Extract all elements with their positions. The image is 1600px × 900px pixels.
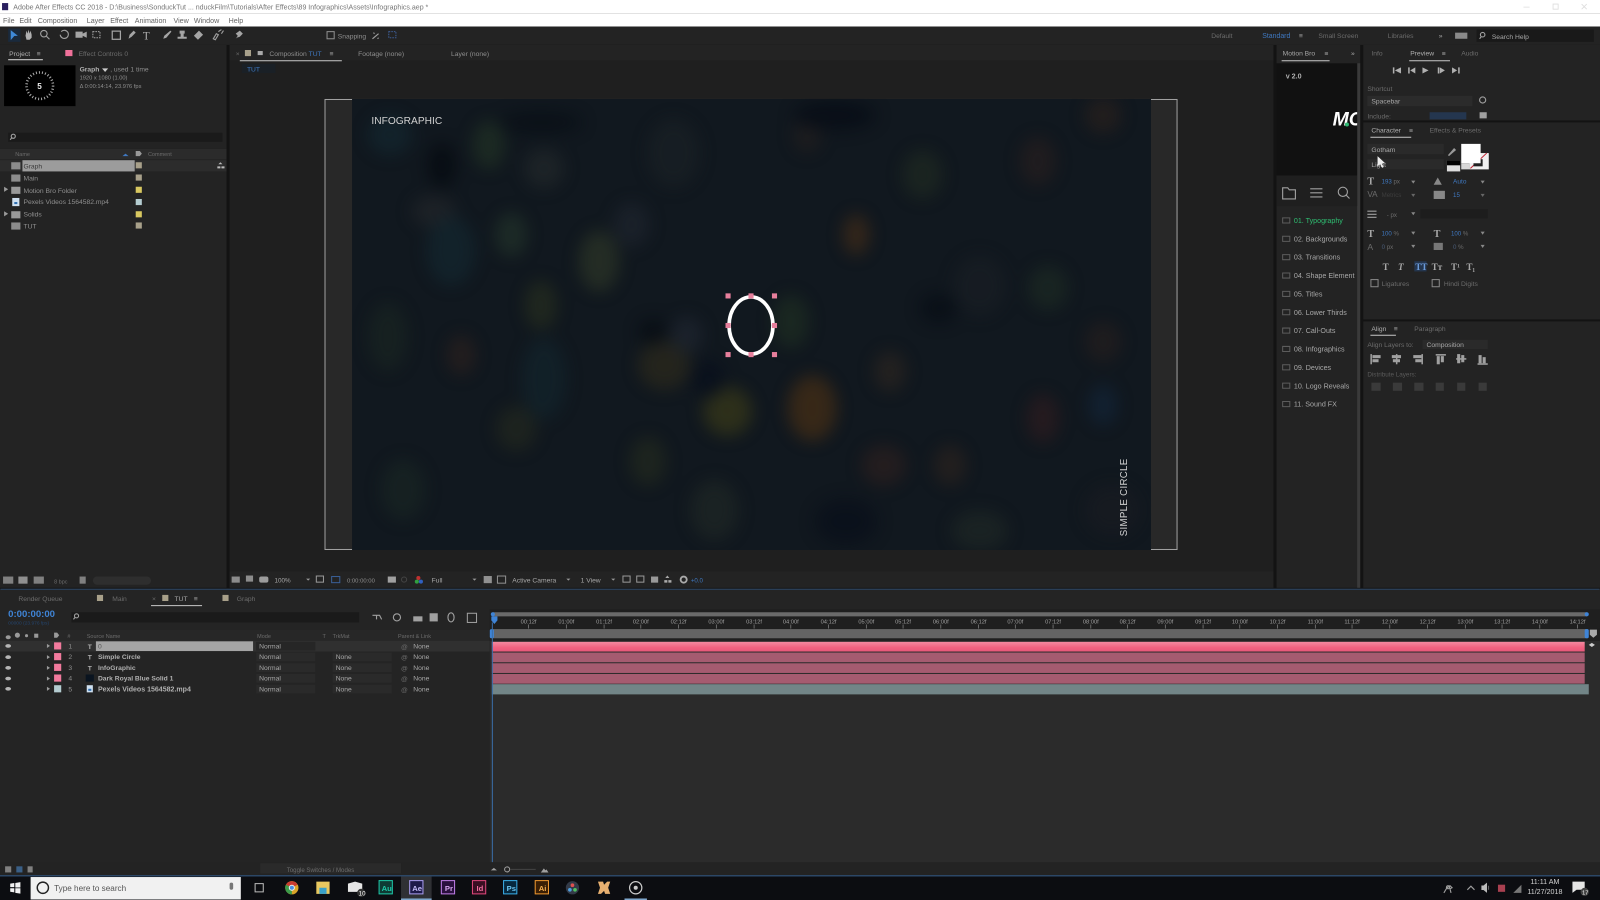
menu bar: Effect	[110, 17, 128, 25]
system tray	[1444, 883, 1521, 893]
time ruler: 08:00f	[1083, 619, 1099, 625]
time ruler: 09:00f	[1157, 619, 1174, 625]
time ruler: 06:12f	[971, 619, 987, 625]
font size row: 193 px	[1382, 179, 1400, 186]
layer 5: Pexels Videos 1564582.mp4: Normal	[259, 686, 281, 693]
time ruler: 05:12f	[895, 619, 911, 625]
column header	[0, 149, 227, 159]
project rows: Solids	[23, 211, 42, 218]
icon: pan behind	[93, 32, 100, 38]
time ruler: 08:12f	[1120, 619, 1136, 625]
panel: preview: Audio	[1461, 51, 1479, 58]
panel: character: Light	[1371, 162, 1386, 169]
mouse cursor	[1378, 156, 1385, 168]
windows taskbar	[0, 877, 1600, 900]
time ruler: 09:12f	[1195, 619, 1211, 625]
ligatures and hindi digits checkboxes: Ligatures	[1382, 281, 1410, 288]
menu bar	[0, 13, 1600, 27]
viewer footer controls: +0.0	[691, 578, 703, 585]
panel: align: ≡	[1394, 326, 1398, 333]
panel: preview: Preview	[1410, 51, 1434, 58]
layer 5: Pexels Videos 1564582.mp4: None	[336, 686, 352, 693]
project item info: Δ 0:00:14:14, 23.976 fps	[80, 84, 142, 90]
window controls	[1523, 4, 1587, 9]
folder list: 08. Infographics	[1294, 346, 1345, 354]
timeline tabs: Main	[112, 596, 127, 603]
layer 2: Simple Circle: Simple Circle	[98, 654, 141, 661]
folder list	[1283, 217, 1355, 409]
time ruler: 11:12f	[1344, 619, 1360, 625]
icon: type tool: T	[143, 30, 150, 42]
time ruler: 04:12f	[821, 619, 837, 625]
layer column header	[0, 630, 490, 641]
thumbnail: graph composition	[4, 65, 76, 106]
time ruler: 02:00f	[633, 619, 649, 625]
work area bar	[490, 629, 1600, 641]
icon: windows start	[10, 882, 20, 894]
layer 2: Simple Circle: None	[336, 654, 352, 661]
menu bar: Help	[229, 17, 243, 25]
folder list: 01. Typography	[1294, 217, 1343, 225]
composition tabs: TUT	[247, 66, 260, 73]
panel: project: Name	[15, 152, 30, 158]
project rows: Graph	[23, 163, 42, 170]
menu bar: Animation	[135, 17, 166, 25]
font dropdowns	[1367, 144, 1444, 154]
toolbar: »	[1439, 33, 1443, 40]
layer 5: Pexels Videos 1564582.mp4: Pexels Videos 1564582.mp4	[98, 686, 191, 693]
time ruler: 03:12f	[746, 619, 762, 625]
icon: task view	[255, 884, 263, 892]
composition frame	[324, 97, 1178, 551]
icon: Photoshop: Ps	[507, 884, 516, 893]
layer 1: 0: 0	[98, 643, 102, 650]
scale rows	[1367, 229, 1485, 252]
layer 2: Simple Circle: Normal	[259, 654, 281, 661]
composition tabs: Composition TUT	[269, 51, 322, 58]
layer bars	[490, 641, 1600, 862]
snapping checkbox	[327, 32, 334, 39]
project rows	[0, 160, 227, 231]
icon: InDesign	[472, 881, 486, 894]
layer 3: InfoGraphic: None	[336, 665, 352, 672]
icon: file explorer	[316, 882, 330, 894]
search box: Type here to search	[54, 884, 126, 893]
time ruler: 01:12f	[596, 619, 612, 625]
logo preview: v 2.0	[1286, 73, 1302, 81]
font size row: 15	[1453, 192, 1460, 199]
composition tabs: Footage (none)	[358, 51, 404, 58]
composition tabs: ×	[236, 51, 240, 58]
menu bar: View	[173, 17, 190, 25]
composition tabs	[236, 50, 489, 73]
time ruler: 12:00f	[1382, 619, 1398, 625]
icon: mail	[348, 882, 366, 897]
icon: brush	[163, 31, 171, 39]
icon: After Effects active	[401, 877, 432, 900]
layer 1: 0: 1	[68, 643, 72, 650]
time ruler: 10:12f	[1270, 619, 1286, 625]
timeline tabs: TUT	[174, 596, 188, 603]
layer 2: Simple Circle	[5, 653, 430, 662]
project search	[8, 133, 222, 142]
scale rows: 0 %	[1453, 244, 1464, 251]
panel: preview	[1363, 45, 1600, 120]
search help box	[1477, 30, 1594, 42]
font size row: Metrics	[1382, 192, 1401, 199]
panel: align: Composition	[1427, 342, 1464, 349]
icon: roto brush	[213, 30, 223, 40]
panel: project	[0, 45, 227, 588]
layer 5: Pexels Videos 1564582.mp4: 5	[68, 686, 72, 693]
menu bar: Window	[194, 17, 220, 25]
folder list: 05. Titles	[1294, 290, 1323, 298]
motion bro tab: Motion Bro	[1283, 51, 1315, 58]
shortcut setting: Shortcut	[1367, 86, 1393, 93]
type style buttons: T₁	[1466, 262, 1475, 272]
folder list: 11. Sound FX	[1294, 401, 1337, 409]
time ruler: 00:12f	[521, 619, 537, 625]
icon: Audition: Au	[382, 884, 392, 893]
icon: camera	[76, 32, 87, 38]
clock: 11/27/2018	[1527, 888, 1562, 896]
logo preview	[1277, 63, 1364, 176]
type style buttons	[1383, 261, 1475, 272]
clock	[1527, 878, 1562, 896]
ligatures and hindi digits checkboxes	[1371, 280, 1478, 288]
layer 2: Simple Circle: 2	[68, 654, 72, 661]
title bar	[0, 0, 1600, 13]
time ruler: 13:12f	[1494, 619, 1510, 625]
icon: Premiere: Pr	[445, 884, 453, 893]
layer 3: InfoGraphic: None	[413, 665, 430, 672]
project rows: Motion Bro Folder	[23, 188, 78, 195]
layer 4: Dark Royal Blue Solid 1: Normal	[259, 676, 281, 683]
folder list: 10. Logo Reveals	[1294, 382, 1350, 390]
panel: motion bro: ≡	[1324, 51, 1328, 58]
panel: project: Effect Controls 0	[79, 51, 128, 58]
viewer footer controls: 100%	[274, 578, 291, 585]
time ruler: 02:12f	[671, 619, 687, 625]
font size row: Auto	[1453, 179, 1467, 186]
time ruler: 03:00f	[708, 619, 725, 625]
scale rows: 0 px	[1382, 244, 1393, 251]
panel: align: Distribute Layers:	[1367, 372, 1417, 379]
icon: puppet pin	[236, 31, 243, 39]
motion bro tools	[1277, 176, 1357, 206]
icon: expand	[389, 32, 396, 38]
icon: After Effects app	[2, 3, 8, 10]
timecode: 00000 (23.976 fps)	[8, 620, 49, 626]
folder list: 06. Lower Thirds	[1294, 309, 1347, 317]
layer column header: Mode	[257, 634, 271, 640]
layer 4: Dark Royal Blue Solid 1: 4	[68, 676, 72, 683]
layer 3: InfoGraphic: InfoGraphic	[98, 665, 136, 672]
panel: motion bro	[1277, 45, 1364, 588]
font size row	[1367, 177, 1485, 199]
project footer buttons: 8 bpc	[54, 580, 68, 586]
viewer footer controls	[230, 571, 1273, 588]
timeline footer: Toggle Switches / Modes	[287, 867, 354, 874]
folder list: 07. Call-Outs	[1294, 327, 1336, 335]
type style buttons: Tт	[1432, 262, 1443, 272]
panel: preview: Include:	[1367, 113, 1391, 120]
project tabs: Project	[9, 51, 30, 58]
icon: Premiere	[441, 881, 455, 894]
window title text: Adobe After Effects CC 2018 - D:\Business\SonduckTut ... nduckFilm\Tutorials\After Effects\89 Infographics\Assets\Infographics.aep *	[13, 5, 429, 12]
viewer footer controls: 1 View	[581, 578, 601, 585]
layer column header: Source Name	[87, 634, 120, 640]
layer 4: Dark Royal Blue Solid 1: None	[336, 676, 352, 683]
icon: chrome	[285, 881, 298, 894]
toolbar: ≡	[1299, 33, 1303, 40]
timeline search	[71, 612, 359, 622]
folder list: 02. Backgrounds	[1294, 235, 1348, 243]
project item info: 1920 x 1080 (1.00)	[80, 76, 128, 82]
stroke width row	[1367, 209, 1488, 219]
project item info	[80, 66, 149, 90]
clock: 11:11 AM	[1530, 878, 1559, 886]
project item info: , used 1 time	[110, 66, 149, 73]
panel: character	[1363, 122, 1600, 319]
panel: project: ≡	[37, 51, 41, 58]
icon: InDesign: Id	[477, 884, 484, 893]
vertical label: SIMPLE CIRCLE: SIMPLE CIRCLE	[1119, 458, 1130, 536]
layer 3: InfoGraphic: 3	[68, 665, 72, 672]
layer 3: InfoGraphic: Normal	[259, 665, 281, 672]
timeline tabs	[18, 595, 256, 606]
icon: DaVinci Resolve	[566, 881, 579, 894]
playhead	[491, 616, 497, 862]
layer 2: Simple Circle: T	[88, 655, 93, 662]
layer 1: 0	[0, 641, 490, 652]
type style buttons: T¹	[1451, 262, 1460, 272]
scale rows: T	[1434, 229, 1441, 240]
video background: blurred foliage	[352, 97, 1151, 551]
search box	[31, 877, 241, 899]
font size row: VA	[1367, 190, 1378, 199]
animated zero ellipse with selection handles	[726, 293, 777, 357]
colour swatches	[1447, 144, 1489, 171]
timeline footer	[0, 862, 1600, 877]
icon: selection arrow	[11, 30, 18, 40]
panel: preview: Info	[1371, 51, 1383, 58]
project footer buttons	[3, 577, 151, 586]
panel: align	[1363, 321, 1600, 588]
panel: composition viewer	[230, 45, 1273, 588]
icon: eyedropper	[1448, 148, 1456, 156]
icon: snapping tools	[372, 33, 379, 39]
toolbar: Search Help	[1492, 34, 1529, 41]
scale rows: 100 %	[1382, 231, 1400, 238]
workspace tabs: Default	[1211, 33, 1233, 40]
icon: eraser	[194, 31, 203, 40]
time ruler: 11:00f	[1308, 619, 1323, 625]
panel: project: Comment	[148, 152, 172, 158]
icon: Illustrator	[535, 881, 548, 894]
toolbar	[0, 27, 1600, 45]
layer 5: Pexels Videos 1564582.mp4: None	[413, 686, 430, 693]
panel: preview: ≡	[1442, 51, 1446, 58]
menu bar: Edit	[19, 17, 32, 25]
panel: character: Effects & Presets	[1430, 128, 1482, 135]
layer 1: 0: None	[413, 643, 430, 650]
panel: preview: Spacebar	[1371, 99, 1401, 106]
layer column header: Parent & Link	[398, 634, 431, 640]
scale rows: 100 %	[1451, 231, 1469, 238]
timeline tabs: ×	[152, 596, 156, 603]
icon: OBS	[624, 882, 647, 900]
ligatures and hindi digits checkboxes: Hindi Digits	[1444, 281, 1478, 288]
time ruler: 06:00f	[933, 619, 949, 625]
layer 4: Dark Royal Blue Solid 1: None	[413, 676, 430, 683]
icon: rotate	[60, 30, 68, 38]
panel: timeline	[0, 589, 1600, 877]
toolbar: Small Screen	[1318, 33, 1359, 40]
layer rows	[0, 641, 490, 694]
panel: align: Align Layers to:	[1367, 342, 1414, 349]
time ruler: 10:00f	[1232, 619, 1248, 625]
timeline tabs: ≡	[194, 596, 198, 603]
layer 3: InfoGraphic	[5, 663, 430, 672]
layer 3: InfoGraphic: @	[401, 665, 408, 672]
type style buttons: TT	[1415, 262, 1428, 272]
distribute buttons	[1371, 383, 1487, 391]
timecode: 0:00:00:00	[8, 609, 55, 620]
panel: character: Gotham	[1371, 147, 1396, 154]
layer 1: 0: T	[88, 644, 93, 651]
playback controls	[1393, 67, 1460, 73]
viewer footer controls: 0:00:00:00	[347, 579, 376, 585]
layer 5: Pexels Videos 1564582.mp4	[5, 685, 430, 694]
toolbar: Standard	[1262, 33, 1290, 40]
font size row: T	[1367, 177, 1374, 188]
layer column header: #	[67, 634, 71, 640]
layer 2: Simple Circle: None	[413, 654, 430, 661]
timeline tabs: Render Queue	[18, 596, 63, 603]
layer 4: Dark Royal Blue Solid 1: Dark Royal Blue Solid 1	[98, 676, 174, 683]
icon: pen	[129, 31, 136, 39]
layer 4: Dark Royal Blue Solid 1	[5, 674, 430, 683]
project rows: Pexels Videos 1564582.mp4	[23, 199, 109, 206]
panel: align: Align	[1371, 326, 1387, 333]
layer 2: Simple Circle: @	[401, 655, 408, 662]
toolbar: Libraries	[1388, 33, 1414, 40]
time ruler: 14:12f	[1570, 619, 1586, 625]
icon: clone stamp	[178, 31, 187, 39]
time ruler: 07:12f	[1045, 619, 1061, 625]
panel: character: Character	[1371, 128, 1402, 135]
align buttons	[1370, 354, 1488, 365]
time ruler: 04:00f	[783, 619, 799, 625]
icon: After Effects active: Ae	[412, 884, 422, 893]
project rows: Main	[23, 176, 38, 183]
stroke width row: - px	[1387, 212, 1397, 219]
menu bar: Layer	[87, 17, 105, 25]
layer 5: Pexels Videos 1564582.mp4: @	[401, 687, 408, 694]
viewer footer controls: Active Camera	[512, 578, 557, 585]
timecode	[8, 609, 55, 626]
icon: orange app	[598, 882, 610, 894]
timeline tabs: Graph	[237, 596, 256, 603]
time ruler: 13:00f	[1457, 619, 1474, 625]
layer column header: TrkMat	[333, 634, 350, 640]
time ruler: 05:00f	[858, 619, 875, 625]
time ruler: 14:00f	[1532, 619, 1548, 625]
action center notifications: 17	[1582, 890, 1588, 896]
time ruler: 01:00f	[558, 619, 575, 625]
icon: zoom	[41, 30, 49, 39]
toolbar: Snapping	[338, 33, 366, 40]
title: INFOGRAPHIC: INFOGRAPHIC	[371, 116, 442, 127]
layer 1: 0: Normal	[259, 643, 281, 650]
icon: mail: 10	[359, 890, 366, 897]
layer 1: 0: @	[401, 644, 408, 651]
menu bar: Composition	[38, 17, 77, 25]
folder list: 03. Transitions	[1294, 254, 1341, 262]
menu bar: File	[3, 17, 15, 25]
timeline switches	[372, 613, 477, 622]
composition tabs: Layer (none)	[451, 51, 489, 58]
layer column header: T	[322, 634, 326, 640]
folder list: 04. Shape Element	[1294, 272, 1355, 280]
panel: motion bro: »	[1351, 51, 1355, 58]
layer 4: Dark Royal Blue Solid 1: @	[401, 676, 408, 683]
scale rows: T	[1367, 229, 1374, 240]
time ruler: 07:00f	[1007, 619, 1024, 625]
icon: Photoshop	[504, 881, 517, 894]
viewer footer controls: Full	[432, 578, 443, 585]
type style buttons: T	[1398, 262, 1404, 272]
type style buttons: T	[1383, 262, 1389, 272]
time ruler	[490, 609, 1600, 629]
icon: hand	[26, 30, 32, 40]
project item info: Graph	[80, 66, 99, 73]
composition tabs: ≡	[330, 51, 334, 58]
action center notifications	[1572, 882, 1589, 896]
icon: Illustrator: Ai	[539, 884, 546, 893]
scale rows: A	[1367, 242, 1373, 252]
time ruler: 12:12f	[1420, 619, 1436, 625]
logo preview: MO	[1333, 109, 1364, 131]
thumbnail: graph composition: 5	[37, 82, 42, 91]
icon: Audition	[379, 881, 392, 894]
project rows: TUT	[23, 224, 37, 231]
icon: rectangle tool	[112, 31, 120, 39]
panel: character: ≡	[1409, 128, 1413, 135]
layer 3: InfoGraphic: T	[88, 665, 93, 672]
folder list: 09. Devices	[1294, 364, 1332, 372]
panel: align: Paragraph	[1414, 326, 1446, 333]
